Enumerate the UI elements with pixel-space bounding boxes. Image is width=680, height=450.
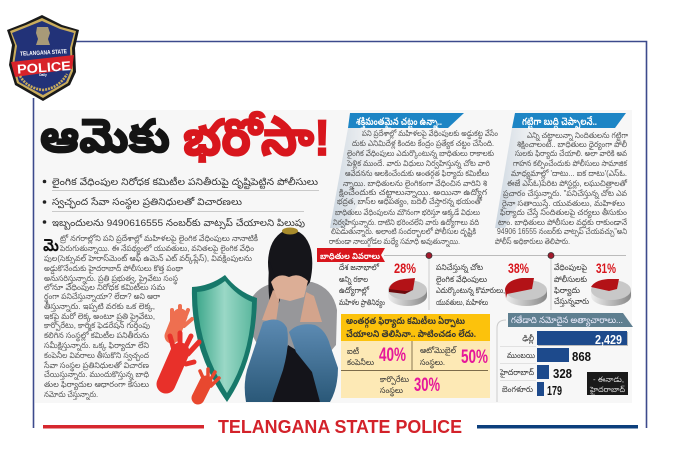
stat: 28 percent: దేశ జనాభాలో [339,263,380,272]
source box: - ఈనాడు, [593,375,624,384]
key points list: స్వచ్ఛంద సేవా సంస్థల ప్రతినిధులతో విచారణలు [52,196,242,210]
heading: శక్తిమంతమైన చట్టం ఉన్నా.. [356,116,442,130]
cell: corporate 30 percent: కార్పొరేటు [380,375,409,385]
column text: రాకుండా నాలుగ్గోడల మధ్యే సమాధి అవుతున్నాయి. [329,237,460,248]
stat: 38 percent: 38% [508,260,529,276]
stat: 38 percent: ఎదుర్కొంటున్న కొమారులు, [436,286,505,296]
column text: లైంగిక వేధింపులు ఎదుర్కొంటున్న బాధితులు రాకాలకు [347,149,494,159]
bar: Delhi: ఢిల్లీ [522,334,534,344]
column text: టాం. బాధితులు పోలీసుల వద్దకు రాకుండానే [498,218,627,229]
cell: corporate 30 percent: 30% [414,375,440,396]
hair [268,229,312,290]
red hand [166,333,199,384]
article body text: అనుసరిస్తున్నారు. ప్రతి ప్రభుత్వ, ప్రైవేటు సంస్థ [44,274,178,285]
stat: 28 percent: ఉద్యోగాల్లో [339,286,370,297]
page frame [34,42,646,428]
heading ribbon [348,113,464,128]
right leg jeans [289,324,338,402]
article body text: తీస్తున్నారు. ఇప్పటి వరకు ఒక లెక్క, [44,302,155,312]
heading text [346,315,476,340]
stat: 28 percent: మహిళల ప్రాతినిధ్యం [339,298,385,309]
stat: 31 percent: ఫిర్యాదు [554,286,580,297]
column text: ఫిర్యాదు చేస్తే నిందితులపై చర్యలు తీసుకుం [500,208,627,219]
heading: గట్టిగా బుద్ధి చెప్పాలనే.. [522,116,597,130]
source box [587,372,628,395]
column shading [495,128,560,228]
bar: Hyderabad: 328 [553,366,572,381]
dark dress [272,345,328,402]
illustration: distressed woman [245,228,338,402]
bar: Bengaluru: బెంగళూరు [502,385,533,394]
panel: victim details [317,248,631,310]
motto: Daily [39,73,47,77]
cell: IT companies 40 percent: 40% [379,345,406,366]
column text: ప్రచారం చేస్తున్నారు. "పనిచేస్తున్న చోట ఎవ [503,189,627,199]
panel: strong laws [329,113,498,248]
article body text: తుల ఫిర్యాదుల ఆధారంగా కేసులు [44,380,149,391]
column text: న్నాయి. బాధితులను లైంగికంగా వేధించిన వారిని శి [343,179,488,189]
panel: internal complaints committees [341,314,490,398]
chain [20,74,67,90]
marker dots [426,252,554,258]
article body text: సమీక్షిస్తున్నారు. ఒక్క ఫిర్యాదూ లేని [44,341,149,352]
article body text: ఇకపై మరో లెక్క అంటూ ప్రతి ప్రైవేటు, [44,312,155,323]
red police banner [11,55,74,77]
title red word: భరోసా! [183,110,330,166]
column text: పెళ్లిక ముందే. వారు విధులు నిర్వహిస్తున్న చోట వారి [346,159,490,169]
key points list: ఇబ్బందులను 9490616555 నంబర్‌కు వాట్సప్ చేయాలని పిలుపు [52,218,306,230]
article body text: లోనూ వేధింపుల నిరోధక కమిటీలు సమ [44,283,166,292]
column text [329,129,498,248]
cell: IT companies 40 percent [347,345,406,367]
bar: Hyderabad [499,365,572,381]
cell: automobile 50 percent [420,346,488,369]
hands on face [271,275,308,301]
section tag [317,248,385,262]
stat: 38 percent: లైంగిక వేధింపులు [436,275,487,285]
emblem [36,27,50,45]
column text: గాహన కల్పించేందుకు పోలీసులు సామాజిక [513,159,628,169]
stat: 31 percent: 31% [596,260,616,276]
logo: Telangana State Police shield [7,15,79,101]
column text: క్షించేందుకు చట్టాలున్నాయి. అయినా ఉద్యోగ [339,188,487,199]
key points list [43,176,319,230]
cell: corporate 30 percent: సంస్థలు [380,386,403,397]
column text: పని ప్రదేశాల్లో మహిళలపై వేధింపులకు అడ్డుకట్ట వేసేం [362,129,498,140]
cell: corporate 30 percent [380,375,440,397]
pie [388,278,427,306]
heading text: చేయాలని తెలిసినా.. పాటించడం లేదు. [346,328,476,340]
cell: automobile 50 percent: సంస్థలు. [420,358,445,369]
heading text: అంతర్గత ఫిర్యాదు కమిటీలు ఏర్పాటు [346,315,465,328]
hair bun [282,228,298,234]
shirt [247,282,337,352]
bar: Delhi: 2,429 [595,332,622,347]
article body text: ర్థంగా పనిచేస్తున్నాయా? లేదా? అని ఆరా [44,292,160,303]
article body text: పెరుగుతున్నాయి. ఈ నేపథ్యంలో యువతులు, వనితలపై లైంగిక వేధిం [59,244,254,255]
column text: మాధ్యమాల్లో 'దాటు... ఐక దాటు'(ఎస్ఓ. [511,169,627,180]
bar: Mumbai: ముంబయి [507,351,536,360]
stat: 31 percent: చేస్తున్నవారు [554,297,589,307]
column text: 94906 16555 నంబర్‌కు వాట్సప్ చేయవచ్చు"అని [497,227,627,237]
footer: TELANGANA STATE POLICE [218,417,462,437]
stat: 38 percent [436,260,547,307]
source box: హైదరాబాద్ [589,385,626,395]
article body text: నమోదు చేస్తున్నారు. [44,390,98,400]
column text: పోలీస్ అధికారులు తెలిపారు. [495,237,570,246]
article body text: ట్రో నగరాల్లోని పని ప్రదేశాల్లో మహిళలపై లైంగిక వేధింపులు నానాటికీ [59,234,258,244]
illustration: threatening hands [166,306,219,398]
hair strands on left side [268,262,280,318]
stat: 31 percent: పోలీసులకు [554,275,587,284]
chart heading text: గతేడాది నమోదైన అత్యాచారాలు... [511,315,623,327]
title [40,110,330,166]
illustration: shield [192,275,257,402]
column text: ఎన్ని చట్టాలున్నా నిందితులను గట్టిగా [527,131,629,142]
cell: IT companies 40 percent: ఐటీ [347,347,359,356]
bar: Hyderabad: హైదరాబాద్ [499,368,534,378]
article body text: కంపెనీల వివరాలు తీసుకొని స్వచ్ఛంద [44,351,149,362]
heading ribbon [512,113,626,128]
arms [262,290,322,322]
cell: automobile 50 percent: ఆటోమొబైల్ [420,346,457,356]
column text: రైనా సతాయిస్తే. యువతులు, మహిళలు [502,199,625,209]
bar: Bengaluru [502,382,562,398]
column text [495,131,629,246]
stat: 31 percent [554,260,631,307]
left leg jeans [245,320,288,402]
column text: శిక్షించాలంటే.. బాధితులు ధైర్యంగా పోలీ [517,140,627,151]
column text: ఈజే ఎస్ఓ)పేరిట పోస్టర్లు, లఘుచిత్రాలతో [507,179,628,190]
bar: Bengaluru: 179 [547,383,562,398]
state name: TELANGANA STATE [20,49,67,58]
drop cap: మె [43,236,59,255]
article body text: సేవా సంస్థల ప్రతినిధులతో విచారణ [43,361,149,372]
article body text [43,234,258,400]
stat: 38 percent: పనిచేస్తున్న చోట [436,263,483,273]
article body text: చేయిస్తున్నారు. ముందుకొస్తున్న బాధి [44,370,149,380]
column text: నిర్వహిస్తున్నారు. దాటిని భరించలేని వారు ఉద్యోగాలు వది [333,218,479,229]
bar: Mumbai [507,348,591,364]
cell: IT companies 40 percent: కంపెనీలు [347,358,374,367]
column text: లిపెడుతున్నారు. అలాంటి సందర్భాలలో పోలీసుల దృష్టికి [331,227,476,238]
stat: 31 percent: వేధింపులపై [554,263,587,273]
section tag text: బాధితుల వివరాలు [320,251,380,261]
article body text: కార్పొరేటు, కార్మిక ఫెడరేషన్ గుర్తింపు [44,321,150,332]
bar chart: crimes registered last year [497,313,633,402]
lower orange hand [198,369,219,398]
stat: 28 percent [339,260,427,309]
stat: 38 percent: యువతులు, మహిళలు [436,298,488,307]
cell: automobile 50 percent: 50% [461,347,488,368]
stat: 28 percent: 28% [394,260,416,276]
column text: సులకు ఫిర్యాదు చేయాలి. అలా వారికి అవ [515,149,627,160]
key points list: లైంగిక వేధింపుల నిరోధక కమిటీల పనితీరుపై దృష్టిపెట్టిన పోలీసులు [52,176,318,189]
article body text: పుల(సెక్సువల్ హెరాస్‌మెంట్ ఆఫ్ ఉమెన్ ఎట్ వర్క్‌ప్లేస్), వివక్షింపులను [44,254,252,264]
column text: దుకు ఎనిమిదేళ్ల కిందట కేంద్రం ప్రత్యేక చట్టం చేసింది. [352,139,494,150]
police word: POLICE [17,58,72,77]
article body text: అడ్డుకొనేందుకు హైదరాబాద్ పోలీసులు కొత్త పంథా [44,264,184,275]
column text: భద్రత, బాస్‌ల ఆధిపత్యం, బదిలీ చేస్తారన్న భయంతో [337,197,483,208]
yellow heading band [341,314,490,341]
pie [505,278,547,306]
title black word: ఆమెకు [40,110,170,162]
stat: 28 percent: అన్ని రకాల [339,275,368,285]
article body text: కలిగిన సంస్థల్లో కమిటీల పనితీరును [44,331,149,342]
pie [591,279,631,306]
bar: Delhi [522,331,628,347]
newspaper clipping background [35,110,632,403]
column text: బాధితులు వేధింపులను మౌనంగా భరిస్తూ అక్కడే విధులు [335,208,480,218]
footer [43,417,638,437]
column shading [330,128,400,228]
chart heading [508,313,633,327]
column text: ఆవేదనను ఆలకించేందుకు అంతర్గత ఫిర్యాదు కమిటీలు [345,169,489,180]
bar: Mumbai: 868 [572,349,591,364]
orange hand [172,306,192,336]
panel: teach a lesson [495,113,629,246]
